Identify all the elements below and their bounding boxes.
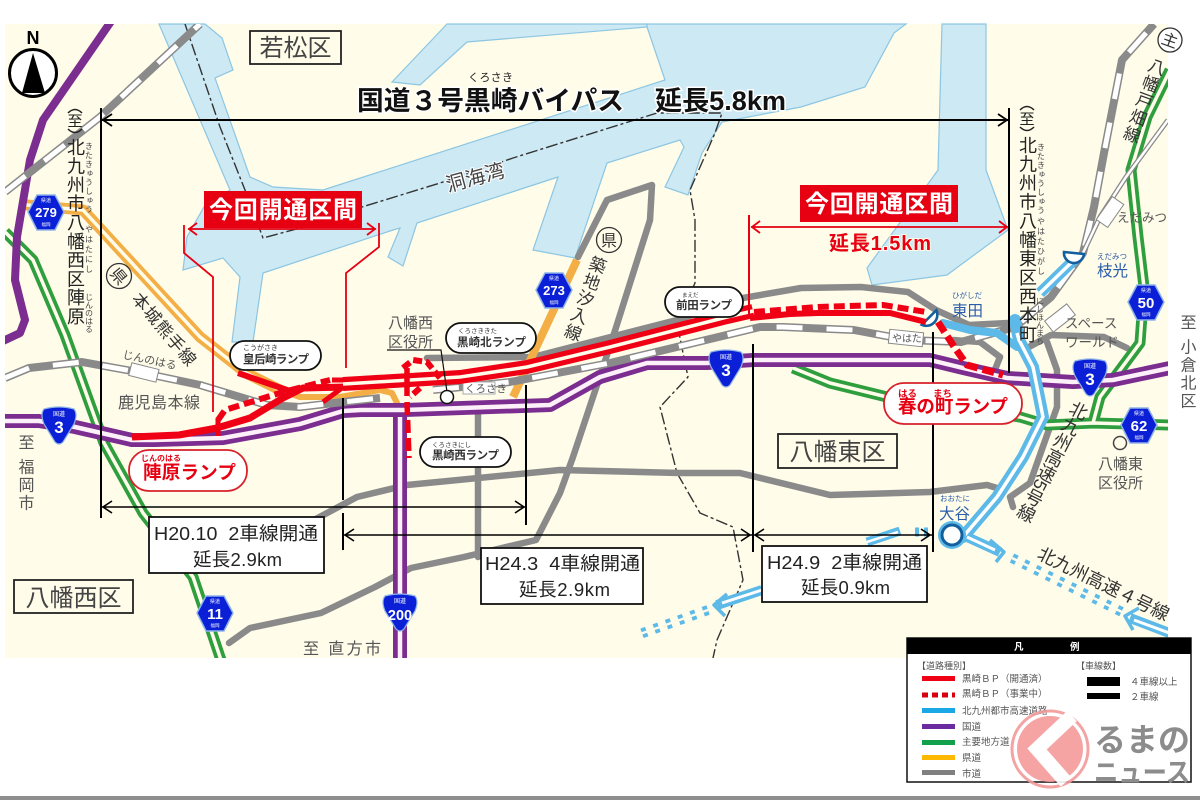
info box: H20.10: H20.10 2車線開通 xyxy=(154,523,318,544)
shield: national route 200: 200 xyxy=(388,608,412,624)
ward label: Wakamatsu: 若松区 xyxy=(260,35,332,62)
legend: 2 lanes xyxy=(1087,691,1159,703)
label: Yahatanishi ward office xyxy=(387,315,454,404)
legend: 2 lanes: ２車線 xyxy=(1130,691,1159,703)
label: Yahatanishi ward office: 八幡西 xyxy=(388,315,433,332)
legend xyxy=(907,638,1191,782)
vertical label: west destination: きたきゅうしゅう xyxy=(84,142,94,214)
label: Yahatahigashi ward office xyxy=(1098,436,1143,492)
station box: Yahata: やはた xyxy=(892,333,922,345)
vertical label: west destination: 至 xyxy=(67,113,83,130)
ramp bubble: Maeda: まえだ xyxy=(682,292,699,299)
info box: H24.9 xyxy=(762,546,927,602)
label: Yahatahigashi ward office: 八幡東 xyxy=(1098,456,1143,473)
station box: Jinnoharu: じんのはる xyxy=(121,348,178,372)
ramp bubble: Jinnoharu: 陣原ランプ xyxy=(143,462,236,483)
shield: national route 3 west: 3 xyxy=(54,418,64,437)
ramp bubble: Harunomachi: 春の町ランプ xyxy=(898,396,1008,417)
watermark: text xyxy=(1094,722,1190,788)
label: Kagoshima main line: 鹿児島本線 xyxy=(118,394,200,412)
ward label: Yahatanishi xyxy=(14,580,133,613)
ramp bubble: Harunomachi xyxy=(884,383,1022,424)
ramp bubble: Jinnoharu: じんのはる xyxy=(141,454,181,463)
info box: H20.10: 延長2.9km xyxy=(193,549,282,570)
shield: regional road 50: 50 xyxy=(1138,295,1154,312)
watermark: text: ニュース xyxy=(1094,758,1190,788)
station box: Jinnoharu xyxy=(121,348,178,382)
legend: prefectural road xyxy=(922,752,982,764)
legend: opened xyxy=(922,673,1048,685)
station box: Edamitsu xyxy=(1096,197,1124,227)
vertical label: east destination: 北九州市八幡東区西本町 xyxy=(1017,136,1037,344)
vertical label: west destination: 北九州市八幡西区陣原 xyxy=(65,138,85,326)
label: Space World xyxy=(1065,316,1119,350)
legend: prefectural road: 県道 xyxy=(962,752,982,764)
ramp bubble: Harunomachi: はる xyxy=(898,389,917,400)
shield: regional road 11: 11 xyxy=(207,606,223,623)
label: Higashida xyxy=(952,290,983,320)
ramp bubble: Kurosakikita: 黒崎北ランプ xyxy=(457,335,526,349)
shield: regional road 50 xyxy=(1128,285,1164,320)
interchange: Higashida xyxy=(920,310,938,326)
shield: national route 3 east: 国道 xyxy=(1084,362,1096,370)
title: 延長5.8km xyxy=(655,86,786,116)
label: Higashida: 東田 xyxy=(952,302,983,320)
ramp bubble: Kurosakinishi: 黒崎西ランプ xyxy=(432,448,500,462)
label: to Kokurakita: 至 小倉北区 xyxy=(1178,314,1196,410)
shield: national route 200 xyxy=(383,594,417,631)
shield: regional road 11: 県道 xyxy=(210,598,220,605)
legend: main regional road: 主要地方道 xyxy=(962,736,1010,748)
red bracket: east opening section xyxy=(749,215,1008,315)
length label: 1.5km: 延長1.5km xyxy=(829,232,931,255)
shield: pref road 279: 279 xyxy=(35,205,57,220)
vertical label: west destination xyxy=(65,110,94,333)
shield: pref road 279: 福岡 xyxy=(42,221,51,228)
label: Otani: おおたに xyxy=(940,494,970,503)
shield: regional road 11: 福岡 xyxy=(210,622,220,629)
info box: H20.10 xyxy=(149,517,324,573)
city roads xyxy=(229,185,1127,643)
legend: city road: 市道 xyxy=(962,768,982,780)
label: Honjo Kumate line: 県 xyxy=(106,265,130,289)
legend: national road: 国道 xyxy=(962,721,982,733)
shield: regional road 50: 県道 xyxy=(1141,287,1151,294)
legend: 【車線数】 xyxy=(1076,660,1121,671)
label: Yahata Tobata line: 主 xyxy=(1159,30,1180,52)
vertical label: east destination xyxy=(1017,106,1046,345)
legend: planned: 黒崎ＢＰ（事業中） xyxy=(962,688,1048,700)
legend: city road xyxy=(922,768,982,780)
banner: west opening section: 今回開通区間 xyxy=(209,197,357,224)
label: Yahata Tobata line xyxy=(1118,28,1182,146)
railway: Kagoshima main line xyxy=(5,24,1168,407)
shield: pref road 279 xyxy=(28,195,64,230)
label: Tsukiji Shioiri line: 県 xyxy=(601,233,617,250)
label: Higashida: ひがしだ xyxy=(952,290,982,300)
vertical label: west destination: じんのはる xyxy=(84,293,94,333)
shield: national route 3 west: 国道 xyxy=(53,410,65,418)
main regional roads xyxy=(5,70,1170,660)
shield: pref road 273 xyxy=(536,273,572,308)
label: Space World: スペース xyxy=(1065,316,1117,331)
dimension: H20.10 section xyxy=(101,385,526,550)
vertical label: east destination: きたきゅうしゅう xyxy=(1036,143,1046,215)
station box: Kurosaki: くろさき xyxy=(465,383,507,395)
banner: west opening section xyxy=(204,191,362,228)
ramp bubble: Kogasaki: 皇后崎ランプ xyxy=(243,352,310,366)
shield: pref road 273: 県道 xyxy=(549,275,559,282)
label: Honjo Kumate line xyxy=(106,264,200,371)
label: Tsukiji Shioiri line: 築地汐入線 xyxy=(559,253,608,344)
north arrow: N xyxy=(26,28,40,48)
legend: 【道路種別】 xyxy=(917,660,971,671)
title: くろさき xyxy=(468,71,513,84)
info box: H24.3: H24.3 4車線開通 xyxy=(485,553,640,574)
map background xyxy=(5,24,1168,658)
label: Yahatahigashi ward office: 区役所 xyxy=(1098,475,1143,492)
label: Kitakyushu expressway No.5: 北九州高速5号線 xyxy=(1013,397,1091,525)
legend: 4 lanes: ４車線以上 xyxy=(1130,676,1178,688)
legend: 4 lanes xyxy=(1087,676,1178,688)
dimension: total length 5.8km xyxy=(101,108,1009,518)
label: Edamitsu interchange: 枝光 xyxy=(1097,262,1128,280)
ramp bubble: Kurosakikita: くろさききた xyxy=(458,327,497,335)
ward label: Yahatahigashi: 八幡東区 xyxy=(790,439,886,466)
shield: pref road 279: 県道 xyxy=(41,197,51,204)
shield: national route 200: 国道 xyxy=(394,597,406,605)
ramp bubble: Kurosakikita xyxy=(446,323,536,353)
banner: east opening section: 今回開通区間 xyxy=(805,191,953,218)
ramp bubble: Kurosakinishi: くろさきにし xyxy=(432,441,471,449)
shield: pref road 273: 福岡 xyxy=(550,299,559,306)
ward boundary line xyxy=(185,24,743,658)
dimension: H24.3 section xyxy=(343,529,752,541)
shield: regional road 11 xyxy=(197,596,233,631)
legend: national road xyxy=(922,721,982,733)
interchange: Edamitsu xyxy=(1064,252,1084,263)
label: Dokai Bay: 洞海湾 xyxy=(443,159,507,197)
red bracket: west opening section xyxy=(184,223,379,412)
legend: expressway: 北九州都市高速道路 xyxy=(962,705,1048,717)
label: Honjo Kumate line: 本城熊手線 xyxy=(128,289,200,371)
ward label: Yahatanishi: 八幡西区 xyxy=(26,585,122,612)
Kurosaki bypass: sections under construction xyxy=(218,305,1003,458)
prefectural road: Honjo Kumate line xyxy=(27,205,397,403)
label: Tsukiji Shioiri line xyxy=(559,228,622,344)
legend: main regional road xyxy=(922,736,1010,748)
shield: regional road 50: 福岡 xyxy=(1142,311,1151,318)
shield: national route 3 east: 3 xyxy=(1085,370,1095,389)
vertical label: east destination: 至 xyxy=(1019,111,1035,128)
title xyxy=(357,71,786,116)
north arrow xyxy=(10,28,56,96)
ramp bubble: Maeda: 前田ランプ xyxy=(676,298,732,312)
ramp bubble: Kogasaki: こうがさき xyxy=(243,343,278,352)
shield: national route 3 centre: 3 xyxy=(721,361,731,380)
label: Space World: ワールド xyxy=(1065,335,1119,350)
ward label: Yahatahigashi xyxy=(778,434,897,468)
dimension: H24.9 section xyxy=(753,332,933,552)
ramp bubble: Kurosakinishi xyxy=(420,437,511,467)
ramp bubble: Jinnoharu xyxy=(129,450,247,491)
label: Edamitsu interchange: えだみつ xyxy=(1097,252,1127,261)
vertical label: east destination: やはたひがし xyxy=(1036,217,1046,277)
shield: national route 3 west xyxy=(42,407,76,444)
shield: regional road 62: 福岡 xyxy=(1134,434,1144,441)
ramp bubble: Harunomachi: まち xyxy=(933,389,952,400)
label: Edamitsu station: えだみつ xyxy=(1117,211,1167,225)
shield: national route 3 centre: 国道 xyxy=(720,353,732,361)
label: to Nogata: 至 直方市 xyxy=(303,640,381,658)
ramp bubble: Kogasaki xyxy=(230,341,321,370)
water: Dokai Bay xyxy=(159,24,1008,342)
label: Edamitsu interchange xyxy=(1097,252,1128,280)
title: 国道３号黒崎バイパス xyxy=(357,86,624,116)
watermark: text: るまの xyxy=(1094,722,1190,758)
banner: east opening section xyxy=(800,185,958,222)
label: Yahata Tobata line: 八幡戸畑線 xyxy=(1118,55,1167,146)
label: to Fukuoka: 至 福岡市 xyxy=(16,434,34,512)
national roads xyxy=(3,20,1170,660)
info box: H24.9: 延長0.9km xyxy=(801,577,890,598)
info box: H24.9: H24.9 2車線開通 xyxy=(767,552,922,573)
watermark: logo xyxy=(1012,711,1088,787)
shield: regional road 62: 62 xyxy=(1131,418,1147,435)
shield: national route 3 east xyxy=(1073,359,1107,396)
Kurosaki bypass: opened sections xyxy=(132,311,926,437)
bottom bar xyxy=(0,796,1200,800)
prefectural road 273 xyxy=(513,260,577,397)
legend: 例 xyxy=(1070,641,1080,653)
station box: Yahata xyxy=(888,329,924,347)
label: Otani: 大谷 xyxy=(939,505,970,523)
ramp bubble: Maeda xyxy=(665,287,743,317)
shield: national route 3 centre xyxy=(709,350,743,387)
label: Otani xyxy=(939,494,970,523)
info box: H24.3 xyxy=(481,548,643,604)
legend: opened: 黒崎ＢＰ（開通済） xyxy=(962,673,1048,685)
shield: pref road 273: 273 xyxy=(543,283,565,298)
interchange: Otani xyxy=(942,525,962,545)
legend: planned xyxy=(922,688,1048,700)
shield: regional road 62 xyxy=(1121,408,1157,443)
Kitakyushu urban expressway xyxy=(640,260,1172,634)
shield: regional road 62: 県道 xyxy=(1134,410,1144,417)
ward label: Wakamatsu xyxy=(250,31,341,64)
legend: 凡 xyxy=(1014,642,1024,653)
label: Kitakyushu expressway No.4: 北九州高速４号線 xyxy=(1034,544,1172,625)
vertical label: west destination: やはたにし xyxy=(84,225,94,275)
label: Yahatanishi ward office: 区役所 xyxy=(388,334,433,351)
legend: expressway xyxy=(922,705,1048,717)
info box: H24.3: 延長2.9km xyxy=(519,579,610,600)
vertical label: east destination: にしほんまち xyxy=(1036,297,1044,345)
station box: Nishihonmachi xyxy=(1045,304,1075,332)
